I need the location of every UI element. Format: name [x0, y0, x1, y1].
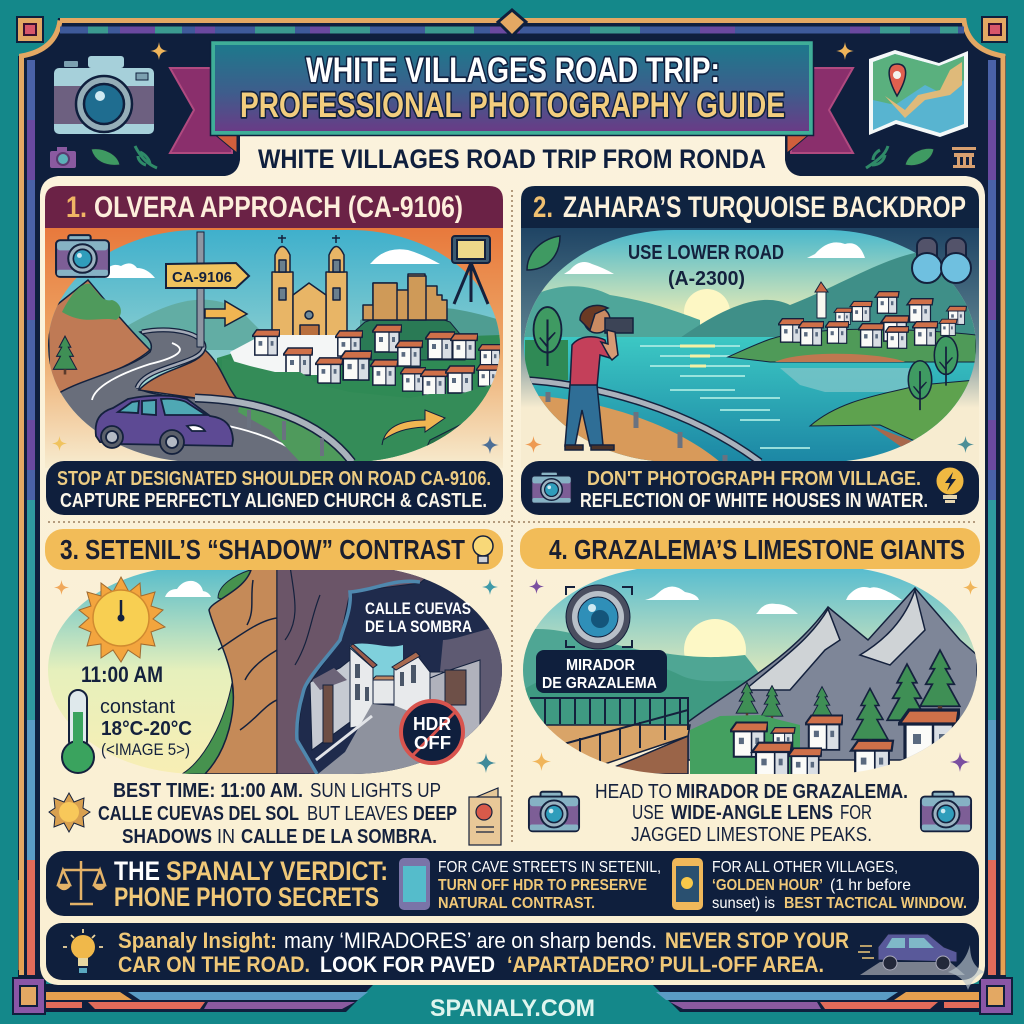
- cream content panel: [40, 130, 985, 985]
- icon: phone purple: [399, 858, 430, 910]
- village: [730, 710, 959, 779]
- label: temperature: 18°C-20°C: [101, 718, 192, 740]
- verdict text 2: BEST TACTICAL WINDOW.: [784, 895, 967, 912]
- panel 3 illustration: [48, 566, 505, 776]
- caption line 1: DON'T PHOTOGRAPH FROM VILLAGE.: [587, 468, 921, 490]
- icon: sparkle right: [836, 42, 854, 60]
- panel 2 backdrop: [521, 228, 979, 468]
- icon: small sun: [49, 793, 90, 832]
- icon: scales: [58, 861, 105, 904]
- caption line 2: REFLECTION OF WHITE HOUSES IN WATER.: [580, 490, 928, 512]
- cave ceiling and right rock: [298, 570, 502, 774]
- island: [728, 329, 976, 362]
- icon: leaf right: [905, 148, 934, 166]
- sparkle: [950, 752, 970, 772]
- panel 3 header: 3. SETENIL’S “SHADOW” CONTRAST: [60, 534, 465, 565]
- car: [96, 396, 233, 454]
- panel 1 caption: [46, 461, 503, 515]
- icon: lens: [566, 585, 632, 649]
- sparkle: [963, 580, 978, 595]
- panel: 1 Olvera approach: [45, 186, 503, 515]
- green below rail: [238, 407, 346, 461]
- limestone mountains: [688, 588, 977, 760]
- icon: booklet: [469, 788, 501, 845]
- right rock: [139, 350, 238, 400]
- right ribbon: [787, 68, 853, 153]
- label: 11:00 AM: 11:00 AM: [81, 662, 163, 687]
- upper rail: [137, 330, 204, 388]
- left rock: [48, 280, 150, 397]
- houses: [778, 282, 966, 348]
- label: image reference: (<IMAGE 5>): [101, 740, 190, 759]
- panel 4 caption: MIRADOR DE GRAZALEMA.: [676, 781, 908, 803]
- icon: sparkle left: [150, 42, 168, 60]
- caption line 1: STOP AT DESIGNATED SHOULDER ON ROAD CA-9106.: [57, 468, 491, 490]
- sparkle: [532, 752, 551, 771]
- number: 1.: [66, 191, 87, 224]
- icon: large camera: [54, 56, 154, 134]
- right building: [394, 658, 430, 710]
- verdict subheading: PHONE PHOTO SECRETS: [114, 882, 379, 912]
- sparkle: [529, 579, 544, 594]
- right shore: [808, 380, 970, 441]
- sand: [538, 396, 719, 461]
- panel 2 caption: [521, 461, 979, 515]
- verdict text 2: ‘GOLDEN HOUR’: [712, 877, 823, 894]
- title line 1: WHITE VILLAGES ROAD TRIP:: [306, 51, 720, 90]
- heading: OLVERA APPROACH (CA-9106): [94, 191, 463, 224]
- sparkle: [52, 436, 67, 451]
- panel 3 caption: BEST TIME: 11:00 AM.: [113, 780, 303, 802]
- sun clock: [79, 577, 165, 662]
- title line 2: PROFESSIONAL PHOTOGRAPHY GUIDE: [240, 86, 785, 125]
- label: use lower road: USE LOWER ROAD: [628, 242, 784, 264]
- road: [60, 331, 299, 461]
- right wall with door: [430, 660, 480, 740]
- icon: thermometer: [62, 690, 94, 773]
- panel 4 header: [520, 528, 980, 569]
- insight bar: [46, 923, 985, 990]
- panel 3 header: [45, 529, 503, 570]
- insight text: many ‘MIRADORES’ are on sharp bends.: [284, 928, 657, 953]
- insight line 2 c: ‘APARTADERO’ PULL-OFF AREA.: [507, 952, 824, 977]
- verdict text 2: (1 hr before: [830, 877, 911, 894]
- left building side: [310, 660, 350, 750]
- foliage: [234, 362, 492, 461]
- guard rail: [195, 398, 352, 462]
- badge: HDR off: HDR: [413, 714, 451, 734]
- label: mirador: DE GRAZALEMA: [542, 675, 657, 692]
- title banner: [210, 40, 814, 136]
- panel 4 caption: [595, 781, 908, 846]
- opening sky: [350, 644, 403, 680]
- rock left arc: [277, 570, 426, 774]
- panel 1 illustration: [48, 230, 502, 462]
- castle: [363, 274, 447, 320]
- panel 3 caption: [98, 780, 457, 848]
- panel 4 caption: HEAD TO: [595, 781, 672, 803]
- panel: 2 Zahara: [521, 186, 979, 515]
- sparkle: [54, 580, 69, 595]
- panel 3 caption: IN: [217, 826, 235, 848]
- icon: small purple camera: [50, 147, 76, 168]
- panel 3 caption: SUN LIGHTS UP: [310, 780, 441, 802]
- street: [318, 704, 420, 774]
- arrow: sign: [205, 301, 247, 326]
- verdict text 2: [712, 859, 967, 912]
- panel 3 caption: SHADOWS: [122, 826, 212, 848]
- badge: HDR off: OFF: [414, 733, 451, 753]
- sparkle: [482, 579, 498, 595]
- green hill under village: [217, 335, 500, 462]
- panel 4 caption: JAGGED LIMESTONE PEAKS.: [631, 824, 872, 846]
- verdict text 2: sunset) is: [712, 895, 775, 912]
- verdict text 1: TURN OFF HDR TO PRESERVE: [438, 877, 647, 894]
- label: calle cuevas: CALLE CUEVAS: [365, 599, 471, 618]
- panel 3 caption: CALLE DE LA SOMBRA.: [241, 826, 437, 848]
- water glints: [640, 346, 810, 448]
- icon: bulb: [473, 536, 493, 563]
- panel 4 caption: USE: [632, 802, 664, 824]
- verdict text 2: FOR ALL OTHER VILLAGES,: [712, 859, 898, 876]
- sparkle: [957, 436, 974, 453]
- dotted dividers: [48, 190, 976, 845]
- label: mirador: MIRADOR: [566, 657, 635, 674]
- panel 2 header: [521, 186, 979, 228]
- icon: binoculars: [912, 238, 971, 283]
- icon: video camera on tripod: [452, 236, 490, 304]
- panel 1 backdrop: [45, 228, 503, 468]
- verdict text 1: FOR CAVE STREETS IN SETENIL,: [438, 859, 661, 876]
- icon: bulb: [936, 467, 964, 503]
- icon: phone gold: [672, 858, 703, 910]
- icon: camera right: [921, 792, 971, 831]
- insight label: Spanaly Insight:: [118, 928, 277, 953]
- icon: torii gate: [952, 147, 976, 168]
- icon: bulb: [63, 929, 103, 973]
- photographer: [565, 305, 633, 450]
- icon: leaf: [527, 236, 560, 270]
- icon: map: [869, 50, 968, 137]
- end building: [374, 680, 394, 704]
- verdict text 1: [438, 859, 661, 912]
- sparkle: [481, 436, 499, 454]
- reflection: [780, 368, 910, 392]
- insight line 2 a: CAR ON THE ROAD.: [118, 952, 310, 977]
- panel: 4 Grazalema: [520, 528, 980, 846]
- footer url: SPANALY.COM: [430, 995, 595, 1022]
- panel 4 caption: WIDE-ANGLE LENS: [671, 802, 833, 824]
- left ribbon: [170, 68, 237, 153]
- verdict heading gold: SPANALY VERDICT:: [166, 856, 388, 886]
- sign label: CA-9106: [172, 269, 232, 286]
- subtitle: WHITE VILLAGES ROAD TRIP FROM RONDA: [258, 144, 766, 174]
- watermark sparkle: [948, 945, 985, 990]
- pines: [736, 650, 960, 748]
- panel 3 caption: BUT LEAVES: [307, 803, 408, 825]
- sparkle: [476, 753, 496, 773]
- overlook: [523, 698, 690, 774]
- icon: camera panel 1: [56, 235, 109, 277]
- insight warning: NEVER STOP YOUR: [665, 928, 849, 953]
- icon: twig right: [866, 146, 888, 168]
- church: [272, 235, 347, 346]
- cliff sunlit: [205, 566, 277, 774]
- icon: leaf left: [91, 149, 120, 165]
- caption line 2: CAPTURE PERFECTLY ALIGNED CHURCH & CASTLE.: [60, 490, 487, 512]
- verdict heading white: THE: [114, 856, 160, 886]
- label: de la sombra: DE LA SOMBRA: [365, 617, 472, 636]
- panel 2 illustration: [524, 230, 976, 463]
- badge: HDR off: [401, 701, 463, 763]
- number: 2.: [533, 191, 553, 224]
- label: mirador: [536, 650, 667, 693]
- verdict text 1: NATURAL CONTRAST.: [438, 895, 595, 912]
- icon: caption camera: [532, 472, 571, 503]
- icon: car: [858, 934, 965, 975]
- foliage: [182, 570, 250, 774]
- icon: twig left: [135, 146, 157, 168]
- left building front: [350, 648, 373, 728]
- insight line 2 b: LOOK FOR PAVED: [320, 952, 495, 977]
- label: constant: constant: [100, 696, 175, 718]
- panel 4 caption: FOR: [840, 802, 872, 824]
- icon: camera left: [529, 792, 579, 831]
- village houses: [230, 325, 502, 395]
- sparkle: [525, 436, 542, 453]
- arrow: curved: [382, 410, 445, 445]
- panel 4 illustration: [523, 566, 977, 779]
- panel 1 header: [45, 186, 503, 228]
- panel 3 caption: CALLE CUEVAS DEL SOL: [98, 803, 299, 825]
- road sign: [166, 232, 249, 347]
- verdict bar: [46, 851, 979, 916]
- label: A-2300: (A-2300): [668, 268, 745, 290]
- castle hill: [355, 320, 466, 360]
- panel 3 caption: DEEP: [413, 803, 457, 825]
- panel: 3 Setenil: [45, 529, 505, 848]
